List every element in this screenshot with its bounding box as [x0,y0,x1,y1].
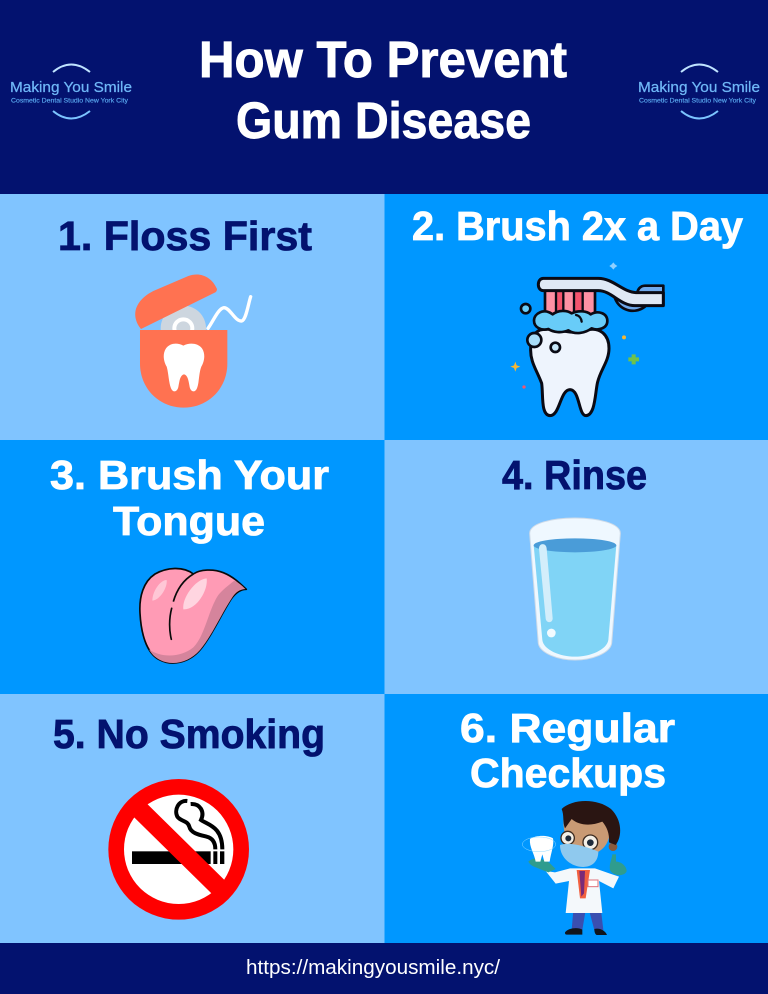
icon: no smoking sign [108,779,249,920]
icon: tongue [140,568,246,663]
held tooth [530,836,553,862]
logo left [10,64,132,118]
coat badge [588,880,598,887]
shoes [565,928,607,935]
panel: brush your tongue [0,440,384,694]
panel: floss first [0,194,384,440]
icon: floss box [135,274,251,408]
heading: floss first: 1. Floss First [58,213,312,259]
face [563,813,610,854]
panel: brush 2x a day [384,194,768,440]
header band [0,0,768,194]
logo right: Making You Smile [638,80,760,96]
heading: brush 2x a day: 2. Brush 2x a Day [412,203,743,249]
legs [572,910,603,930]
heading: regular checkups: 6. Regular [460,705,675,751]
heading: brush your tongue [50,452,329,544]
heading: rinse: 4. Rinse [502,452,647,498]
heading: regular checkups: Checkups [470,750,666,796]
icon: dentist [522,801,627,935]
panel: no smoking [0,694,384,943]
footer band [0,943,768,994]
icon: glass of water [530,518,620,660]
panel: regular checkups [384,694,768,943]
gloves [528,854,627,875]
title [199,31,567,149]
panel: rinse [384,440,768,694]
shirt and tie [577,870,590,898]
ear [609,842,617,851]
logo left: Making You Smile [10,80,132,96]
heading: brush your tongue: 3. Brush Your [50,452,329,498]
heading: no smoking: 5. No Smoking [53,711,325,757]
title: How To Prevent [199,31,567,88]
heading: regular checkups [460,705,675,796]
mask [560,844,598,867]
hair [562,801,620,845]
logo right [638,64,760,118]
logo right: Cosmetic Dental Studio New York City [639,98,757,104]
lab coat [546,868,619,913]
glasses [561,831,598,850]
heading: brush your tongue: Tongue [113,498,265,544]
title: Gum Disease [236,92,531,149]
sparkle ring [522,837,556,852]
icon: toothbrush and tooth [510,262,663,416]
logo left: Cosmetic Dental Studio New York City [11,98,129,104]
footer url: https://makingyousmile.nyc/ [246,957,500,979]
